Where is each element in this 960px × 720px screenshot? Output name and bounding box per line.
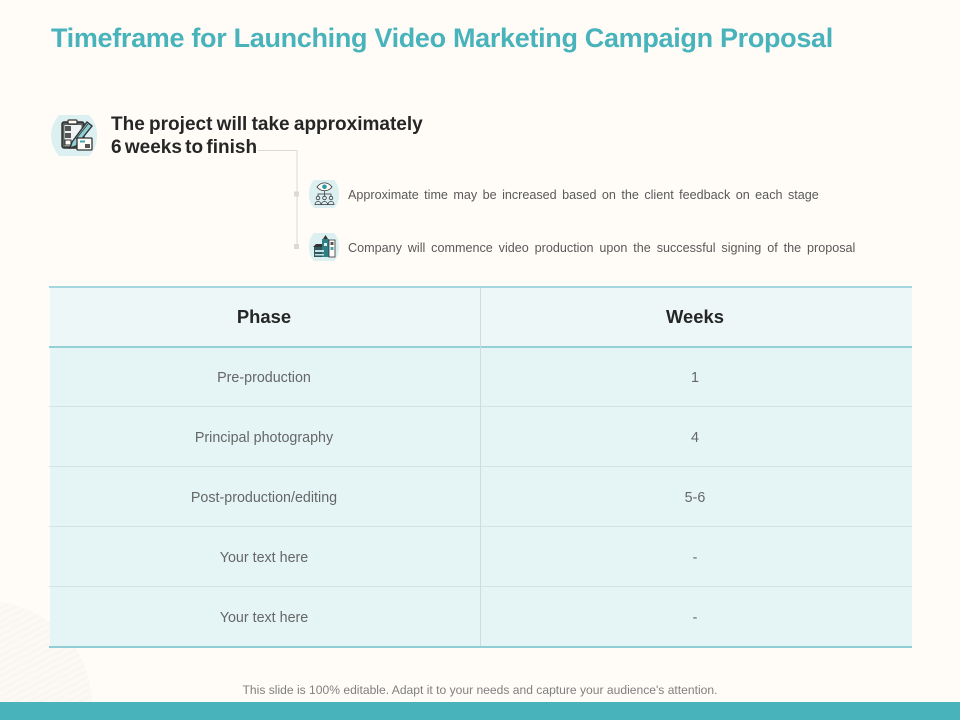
table: phases and weeks — [49, 286, 912, 648]
key message heading: 6 weeks to finish — [111, 137, 257, 158]
connector line — [258, 150, 299, 249]
value: 4: 4 — [691, 430, 699, 446]
title: Timeframe for Launching Video Marketing Campaign Proposal — [51, 23, 833, 53]
key message heading — [111, 114, 423, 158]
note: client feedback: Approximate time may be increased based on the client feedback on each stage — [348, 188, 819, 202]
row: placeholder one: Your text here — [220, 550, 308, 566]
row: post-production: Post-production/editing — [191, 490, 337, 506]
table header — [50, 287, 912, 347]
row: placeholder two: Your text here — [220, 610, 308, 626]
value: 1: 1 — [691, 370, 699, 386]
column heading: weeks: Weeks — [666, 306, 724, 327]
column heading: phase: Phase — [237, 306, 291, 327]
value: dash one: - — [693, 550, 697, 566]
note: video production: Company will commence video production upon the successful signing of the proposal — [348, 241, 855, 255]
footer note: This slide is 100% editable. Adapt it to your needs and capture your audience's attention. — [243, 683, 717, 697]
decorative corner pattern — [0, 600, 95, 702]
value: 5-6: 5-6 — [685, 490, 705, 506]
bottom bar — [0, 702, 960, 720]
row: principal photography: Principal photography — [195, 430, 333, 446]
table body — [50, 347, 912, 647]
icon: eye over people — [309, 180, 339, 208]
value: dash two: - — [693, 610, 697, 626]
key message heading: The project will take approximately — [111, 114, 423, 135]
row: pre-production: Pre-production — [217, 370, 311, 386]
icon: building — [309, 233, 339, 261]
icon: checklist and pencil — [51, 115, 97, 156]
